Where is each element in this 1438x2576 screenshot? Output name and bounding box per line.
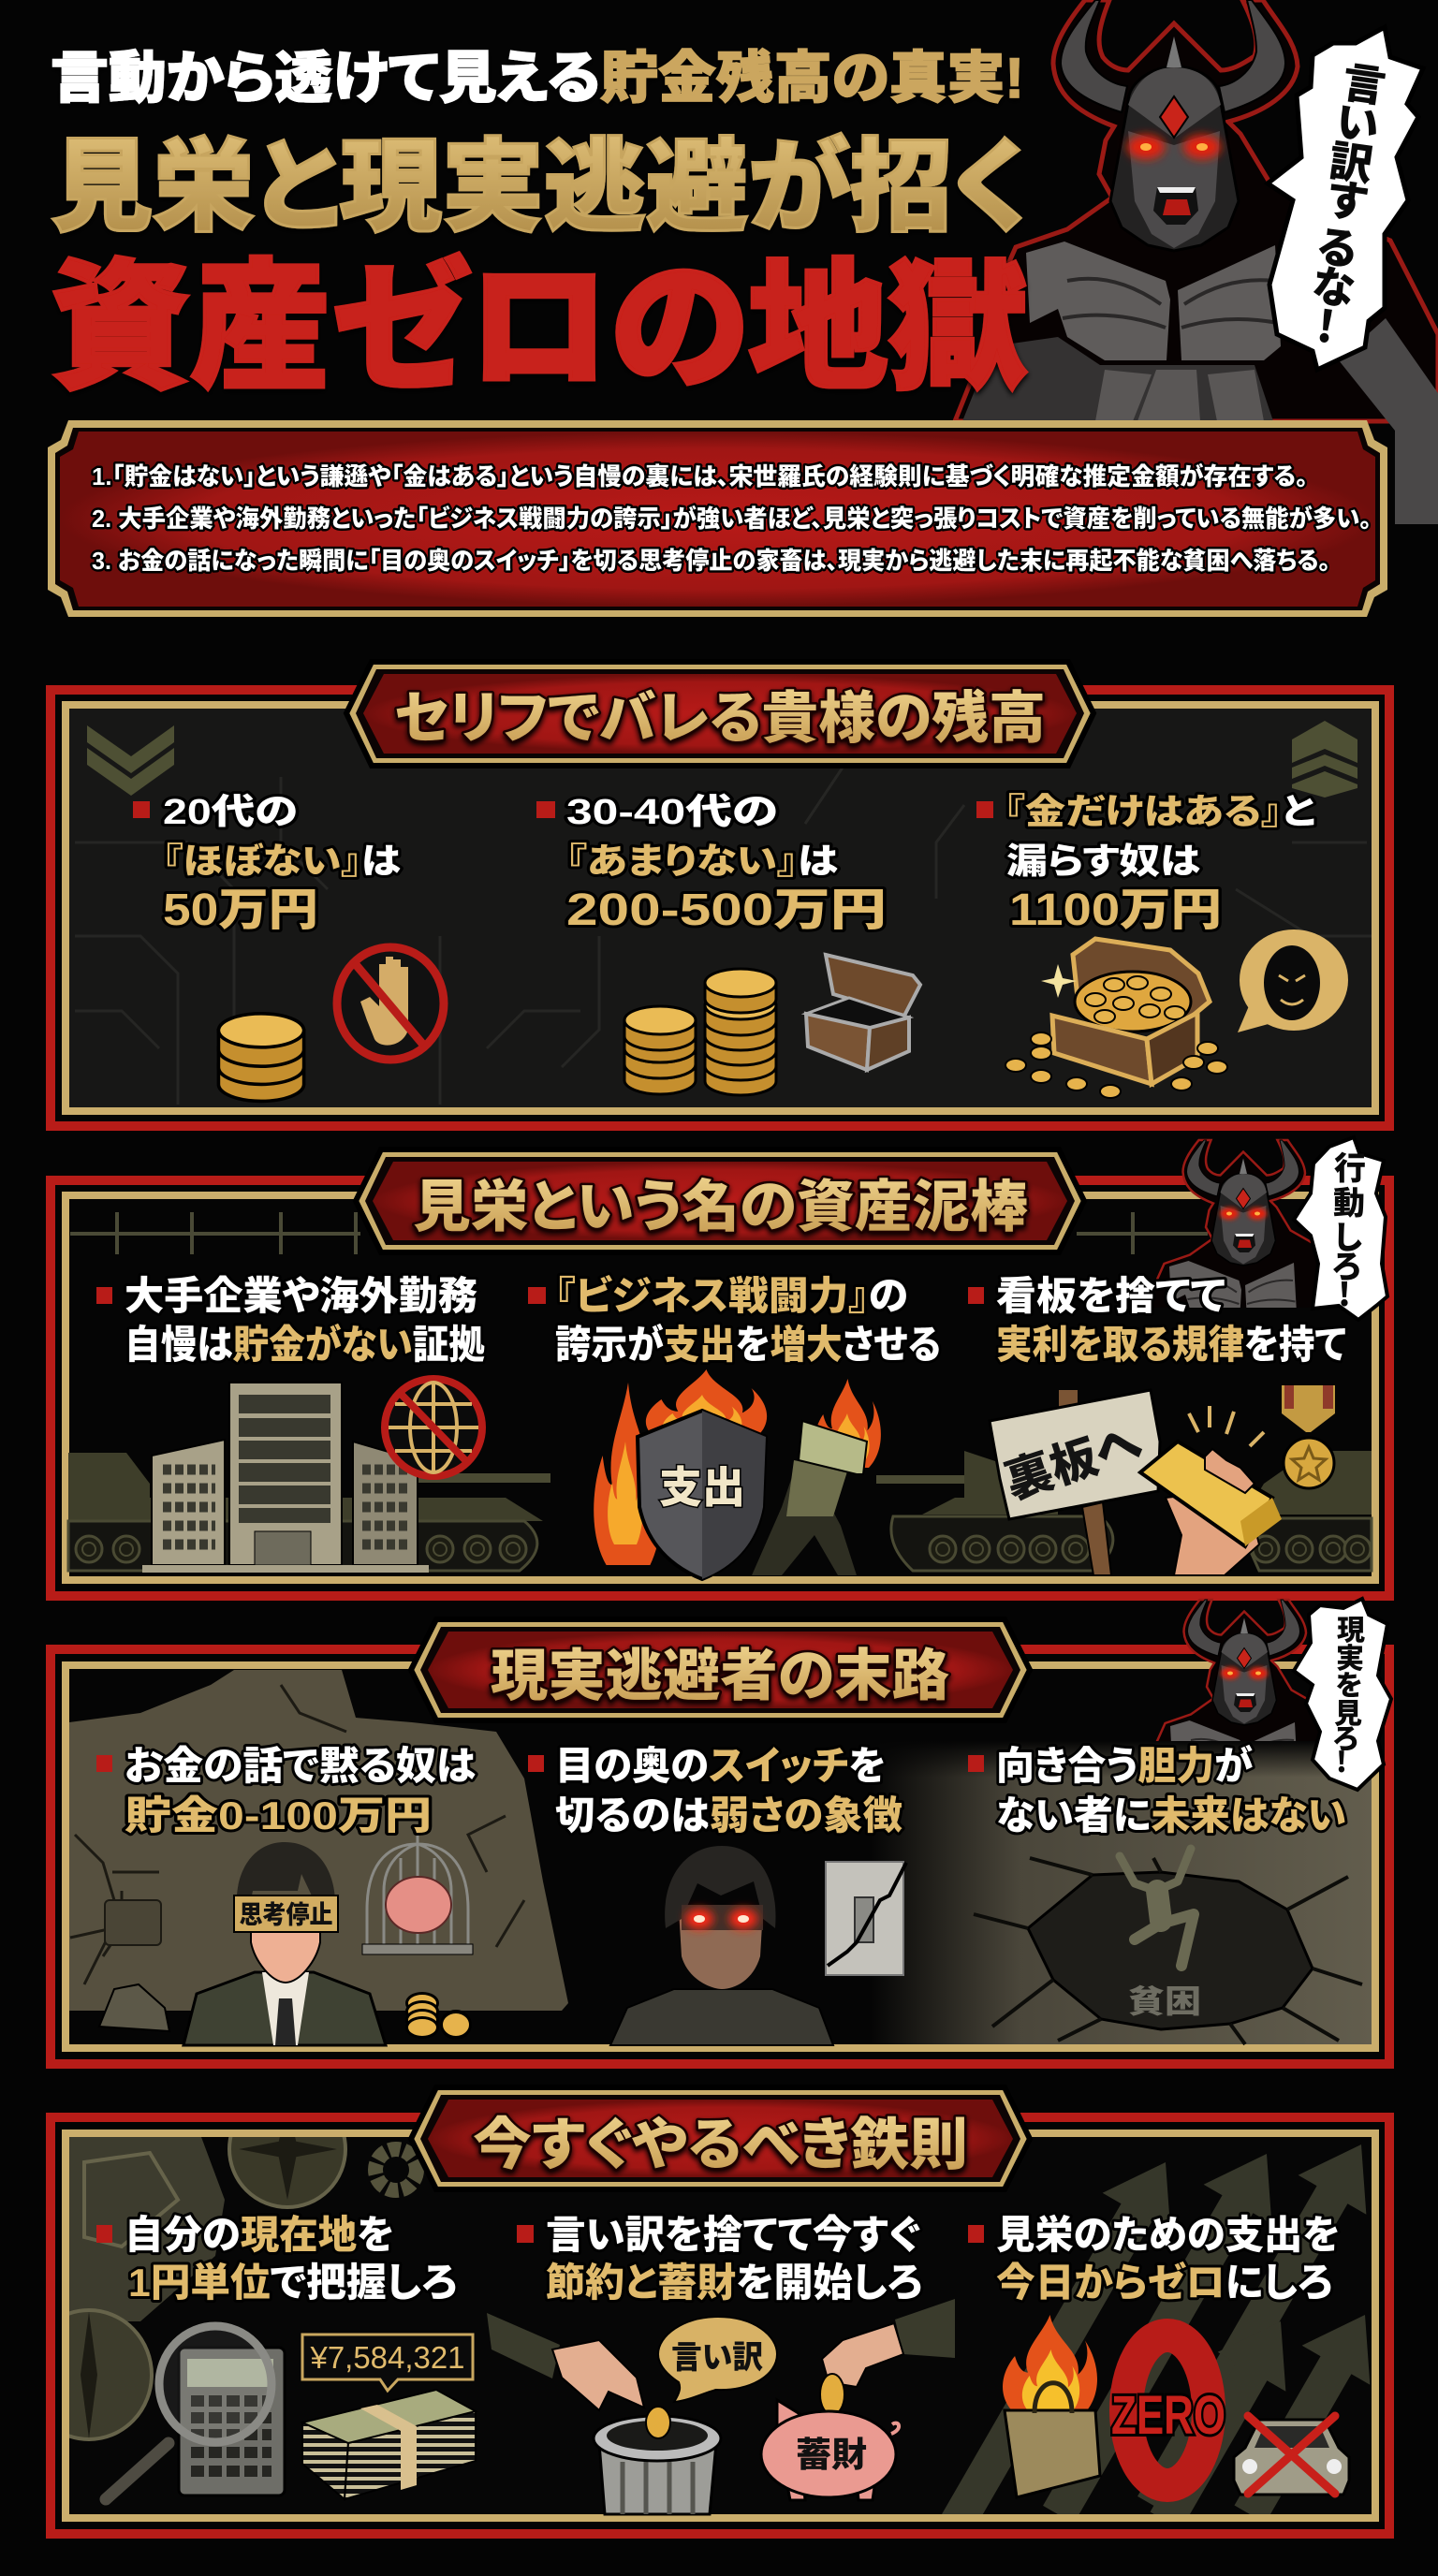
crack wall	[871, 1741, 1372, 2044]
speech bubble: 行動しろ	[1294, 1137, 1387, 1320]
bullet 2: 200-500万円	[566, 886, 887, 935]
bullet 2: 誇示が支出を増大させる	[555, 1323, 941, 1367]
bullet 3: ない者に未来はない	[996, 1793, 1346, 1837]
icon: person carrying money	[752, 1379, 881, 1575]
bullet 3: 向き合う胆力が	[996, 1744, 1253, 1788]
icon: medal	[1282, 1385, 1335, 1488]
icon: coins and empty chest	[624, 955, 920, 1095]
icon: rock	[99, 1984, 169, 2031]
plate	[411, 1619, 1030, 1720]
bullet 2	[528, 1744, 902, 1837]
bullet 1	[96, 1744, 476, 1837]
bullet 3: 見栄のための支出を	[996, 2213, 1340, 2257]
icon: piggy bank	[761, 2400, 899, 2500]
rank chevrons	[87, 725, 174, 796]
bullet 2: 30-40代の	[566, 793, 778, 832]
bullet 2: 『ビジネス戦闘力』の	[555, 1274, 908, 1318]
bullet 1: お金の話で黙る奴は	[125, 1744, 476, 1788]
label: 金額	[302, 2334, 473, 2391]
bullet 1	[96, 1274, 485, 1367]
icon: hand with gold bar	[1140, 1406, 1282, 1575]
icon: climbing person	[1120, 1849, 1194, 1966]
icon: coins	[406, 1994, 470, 2038]
icon: burning shield	[594, 1369, 767, 1579]
bullet 3	[968, 1744, 1346, 1837]
icon: piggy bank: 蓄財	[796, 2426, 867, 2477]
heading: 今すぐやるべき鉄則	[473, 2114, 968, 2176]
icon: treasure chest	[1005, 939, 1227, 1098]
icon: money stack	[302, 2390, 476, 2499]
bullet 1: 貯金0-100万円	[125, 1793, 432, 1837]
icon: coin	[820, 2374, 844, 2415]
title line 3: 資産ゼロの地獄	[51, 249, 1028, 406]
icon: light switch	[826, 1862, 906, 1975]
bullet 3	[968, 2213, 1340, 2305]
bullet 1	[133, 793, 402, 935]
bullet 1: 大手企業や海外勤務	[125, 1274, 477, 1318]
bullet 2: 『あまりない』 は	[566, 842, 839, 882]
plate	[356, 1149, 1084, 1252]
title	[51, 47, 1028, 406]
bullet 1: 自分の現在地を	[125, 2213, 394, 2257]
summary text 2: 2. 大手企業や海外勤務といった「ビジネス戦闘力の誇示」が強い者ほど、見栄と突っ張りコストで資産を削っている無能が多い。	[92, 505, 1372, 533]
bullet 3: 『金だけはある』 と	[1005, 793, 1315, 832]
icon: caged brain	[362, 1830, 473, 1954]
icon: no hand	[337, 947, 444, 1060]
panel 2: 見栄という名の資産泥棒	[51, 1137, 1389, 1596]
icon: speech bubble with face	[1238, 929, 1348, 1032]
speech bubble: 言い訳するな: 言い訳するな!	[1309, 49, 1390, 356]
barbed wire	[70, 1212, 1208, 1254]
title line 1: 言動から透けて見える 貯金残高の真実!	[51, 47, 1024, 110]
plate	[411, 2087, 1030, 2189]
speech bubble: 言い訳: 言い訳	[671, 2332, 763, 2378]
label: 思考停止: 思考停止	[240, 1895, 333, 1931]
background compass and gears	[69, 2137, 424, 2441]
panel 4: 今すぐやるべき鉄則	[26, 2087, 1399, 2542]
bullet 2: 言い訳を捨てて今すぐ	[546, 2213, 920, 2257]
building	[142, 1383, 429, 1573]
bullet 3: 1100万円	[1009, 886, 1222, 935]
main demon character	[955, 0, 1438, 524]
icon: big zero: ZERO	[1111, 2385, 1225, 2446]
small demon 2	[1155, 1599, 1307, 1741]
speech bubble: 現実を見ろ: 現実を見ろ!	[1333, 1607, 1365, 1780]
panel 3: 現実逃避者の末路	[51, 1599, 1391, 2064]
icon: left hand	[487, 2313, 644, 2410]
bullet 1: 1円単位で把握しろ	[128, 2261, 457, 2305]
summary text 1: 1.「貯金はない」という謙遜や「金はある」という自慢の裏には、宋世羅氏の経験則に基づく明確な推定金額が存在する。	[92, 462, 1308, 490]
bullet 3: 漏らす奴は	[1006, 842, 1201, 882]
bullet 2	[528, 1274, 941, 1367]
bullet 2: 切るのは弱さの象徴	[555, 1793, 902, 1837]
title line 2: 見栄と現実逃避が招く	[51, 130, 1028, 243]
bullet 3	[976, 793, 1315, 935]
icon: burning shield: 支出	[659, 1454, 745, 1515]
bullet 1: 『ほぼない』 は	[163, 842, 402, 882]
icon: burning bag	[1003, 2315, 1100, 2497]
rank badge	[1292, 721, 1357, 798]
bullet 2: 節約と蓄財を開始しろ	[546, 2261, 922, 2305]
bullet 2: 目の奥のスイッチを	[555, 1744, 886, 1788]
speech bubble: 行動しろ: 行動しろ!	[1332, 1143, 1366, 1315]
plate	[346, 662, 1093, 766]
icon: coin stack	[218, 1014, 304, 1101]
bullet 1	[96, 2213, 457, 2305]
label: 金額: ¥7,584,321	[310, 2340, 464, 2375]
bullet 1: 自慢は貯金がない証拠	[125, 1323, 485, 1367]
panel 1: セリフでバレる貴様の残高	[51, 662, 1389, 1126]
tank right	[876, 1451, 1372, 1571]
bullet 2	[536, 793, 887, 935]
icon: hole: 貧困	[1128, 1976, 1201, 2022]
bullet 3: 今日からゼロにしろ	[996, 2261, 1332, 2305]
speech bubble: 言い訳	[658, 2317, 777, 2402]
bullet 3: 看板を捨てて	[996, 1274, 1225, 1318]
bullet 3: 実利を取る規律を持て	[996, 1323, 1346, 1367]
tank left	[68, 1453, 550, 1571]
speech bubble: 現実を見ろ	[1294, 1599, 1391, 1790]
man with glowing eyes	[610, 1846, 833, 2045]
icon: trash can	[594, 2407, 721, 2514]
man in suit	[183, 1842, 386, 2045]
rock wall	[69, 1670, 568, 2011]
speech bubble: 言い訳するな	[1268, 27, 1423, 370]
icon: sign	[990, 1390, 1160, 1575]
background arrows	[942, 2144, 1371, 2514]
icon: hole	[974, 1849, 1362, 2044]
summary text 3: 3. お金の話になった瞬間に「目の奥のスイッチ」を切る思考停止の家畜は、現実から逃避した末に再起不能な貧困へ落ちる。	[92, 547, 1330, 575]
icon: calculator and magnifier	[106, 2326, 285, 2499]
icon: big zero	[1111, 2335, 1225, 2485]
icon: right hand	[822, 2299, 955, 2387]
small demon 1	[1155, 1138, 1311, 1308]
icon: crossed car	[1234, 2416, 1349, 2495]
bullet 2	[517, 2213, 922, 2305]
heading: 現実逃避者の末路	[491, 1645, 949, 1707]
bullet 1: 20代の	[163, 793, 298, 832]
bullet 3	[968, 1274, 1346, 1367]
bullet 1: 50万円	[163, 886, 318, 935]
heading: セリフでバレる貴様の残高	[394, 687, 1046, 750]
icon: no globe	[385, 1379, 482, 1476]
icon: sign: 裏板へ	[995, 1405, 1149, 1513]
summary panel	[48, 420, 1387, 617]
heading: 見栄という名の資産泥棒	[413, 1176, 1028, 1238]
